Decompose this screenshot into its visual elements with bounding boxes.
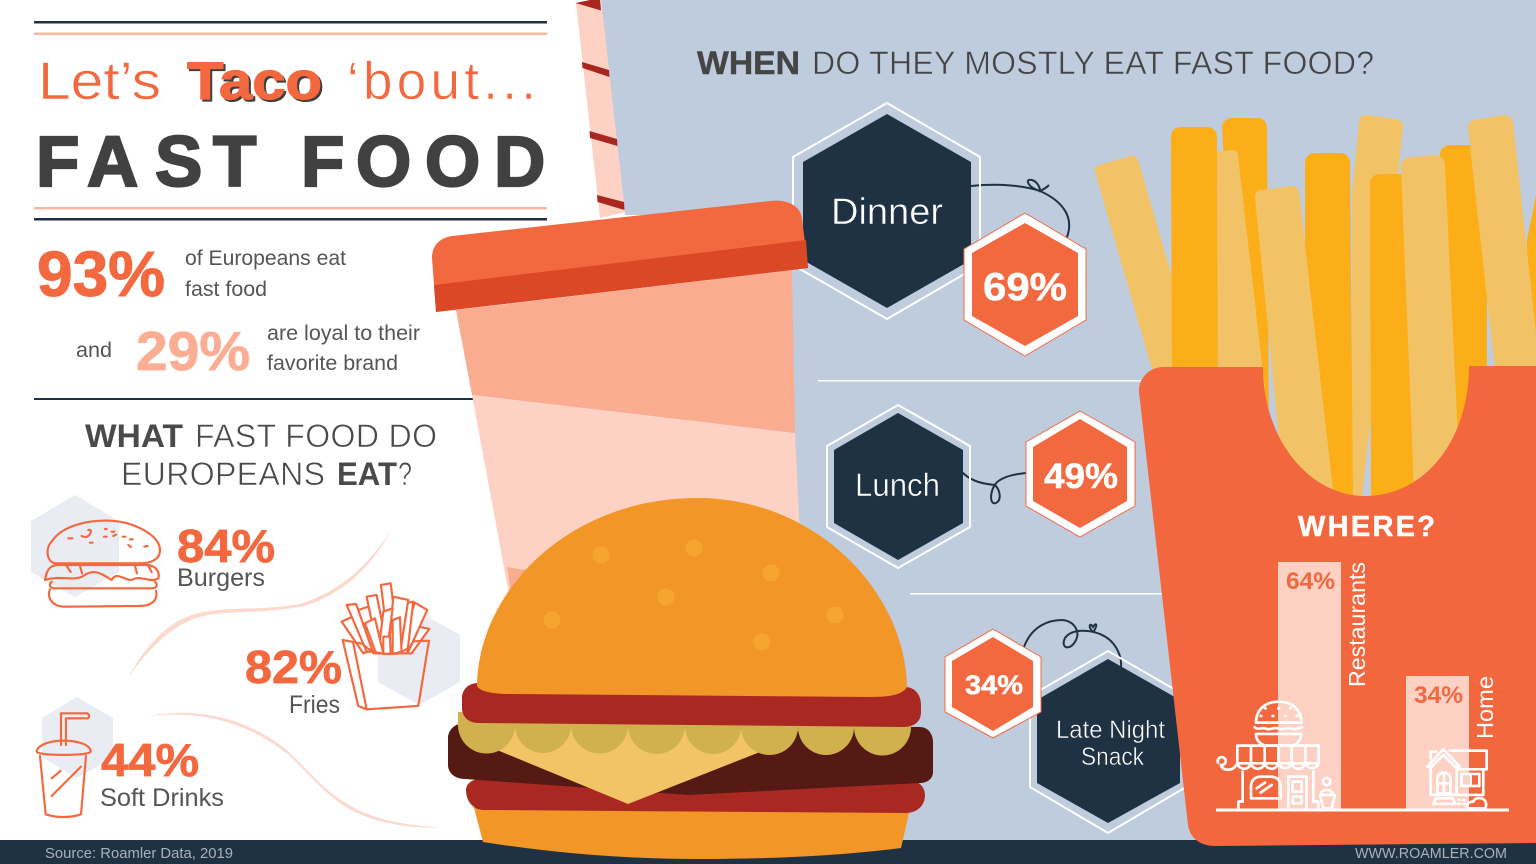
connector: late night (1024, 620, 1121, 667)
heading: what fast food: FAST FOOD DO (195, 418, 437, 454)
burger sesame seeds (544, 540, 844, 650)
burger bottom bun (472, 800, 912, 859)
title block (34, 21, 547, 220)
stat: burgers 84%: 84% (177, 520, 275, 572)
bar: home 34%: Home (1472, 676, 1498, 739)
hex: 49%: 49% (1044, 457, 1118, 496)
burger lower tomato (466, 779, 925, 813)
cup body (456, 270, 800, 600)
icon: burger outline (45, 521, 160, 607)
footer bar (0, 840, 1536, 864)
late night section (945, 620, 1186, 833)
hex: 34% (945, 629, 1041, 738)
hex: 69% (964, 213, 1086, 356)
burger patty (448, 723, 933, 795)
heading: FAST FOOD: FAST (36, 123, 256, 202)
heading: when do they eat: DO THEY MOSTLY EAT FAST FOOD? (812, 45, 1374, 81)
divider lines (818, 380, 1170, 594)
lunch section (827, 405, 1135, 568)
decorative curved path two (147, 713, 440, 828)
icon: fries outline (342, 583, 429, 709)
hex: late night: Snack (1081, 743, 1144, 771)
bar: restaurants 64%: Restaurants (1344, 562, 1370, 687)
decorative curved path one (128, 528, 393, 677)
connector: lunch (963, 473, 1026, 503)
icon: soft drink outline (37, 713, 91, 817)
illustration: large burger (448, 498, 933, 859)
hex background: fries (378, 612, 460, 705)
hex background: burgers (31, 495, 119, 597)
bar: restaurants 64% (1278, 562, 1370, 809)
heading: Let's Taco 'bout: Taco (187, 52, 322, 111)
chart: where (1216, 511, 1509, 812)
stat: 93% of Europeans: of Europeans eat (185, 247, 346, 270)
icon: house (1427, 749, 1487, 808)
hex: 34%: 34% (965, 670, 1023, 700)
stat: burgers 84%: Burgers (177, 564, 265, 592)
burger top bun (477, 498, 907, 697)
stat: soft drinks 44%: Soft Drinks (100, 784, 224, 812)
heading: Let's Taco 'bout: ‘bout... (347, 52, 536, 111)
stat: fries 82%: 82% (245, 641, 342, 693)
footer bar: WWW.ROAMLER.COM (1355, 846, 1507, 862)
cup lid (432, 201, 808, 312)
burger cheese (490, 725, 800, 804)
stat: 29% loyal: 29% (136, 320, 250, 382)
bar: restaurants 64%: 64% (1286, 568, 1335, 595)
stat: soft drinks 44%: 44% (101, 734, 199, 786)
chart: where: WHERE? (1298, 511, 1435, 543)
heading: what fast food: EAT (337, 456, 397, 492)
stat: fries 82%: Fries (289, 691, 340, 719)
hex: late night (1030, 651, 1186, 833)
bar: home 34%: 34% (1414, 682, 1463, 709)
stat: burgers 84% (177, 520, 275, 592)
back fries (1095, 115, 1536, 500)
heading: what fast food: ? (398, 456, 412, 492)
stat: soft drinks 44% (100, 734, 224, 812)
heading: what fast food: EUROPEANS (121, 456, 325, 492)
heading: when do they eat: WHEN (697, 45, 800, 81)
illustration: drink cup (432, 0, 808, 600)
dinner section (793, 103, 1086, 356)
heading: what fast food: WHAT (85, 418, 183, 454)
hex: late night: Late Night (1056, 716, 1165, 744)
stat: 29% loyal (76, 320, 420, 382)
hex: 69%: 69% (983, 266, 1067, 309)
stat: 93% of Europeans (37, 238, 346, 310)
stat: fries 82% (245, 641, 342, 719)
burger pickles (458, 712, 911, 756)
heading: FAST FOOD (36, 123, 545, 202)
hex: lunch: Lunch (855, 467, 940, 503)
illustration: large fries (1095, 115, 1536, 846)
hex background: drinks (42, 697, 113, 778)
stat: 93% of Europeans: 93% (37, 238, 165, 310)
heading: Let's Taco 'bout (38, 52, 536, 113)
hex: dinner: Dinner (831, 191, 943, 232)
cup straw (576, 0, 625, 218)
blue background panel (601, 0, 1536, 842)
hex: dinner (793, 103, 980, 319)
stat: 29% loyal: and (76, 339, 112, 362)
stat: 29% loyal: favorite brand (267, 352, 398, 375)
stat: 93% of Europeans: fast food (185, 278, 267, 301)
bar: home 34% (1406, 676, 1498, 809)
hex: 49% (1026, 411, 1135, 537)
fry box (1139, 366, 1536, 846)
heading: Let's Taco 'bout: Let’s (38, 52, 161, 111)
heading: Let's Taco 'bout: Taco (189, 54, 324, 113)
heading: what fast food (85, 418, 437, 492)
heading: FAST FOOD: FOOD (301, 123, 545, 202)
connector: dinner (971, 180, 1069, 237)
burger upper tomato (462, 683, 921, 727)
footer bar: Source: Roamler Data, 2019 (45, 846, 233, 862)
icon: restaurant (1218, 702, 1335, 808)
stat: 29% loyal: are loyal to their (267, 322, 420, 345)
hex: lunch (827, 405, 970, 568)
